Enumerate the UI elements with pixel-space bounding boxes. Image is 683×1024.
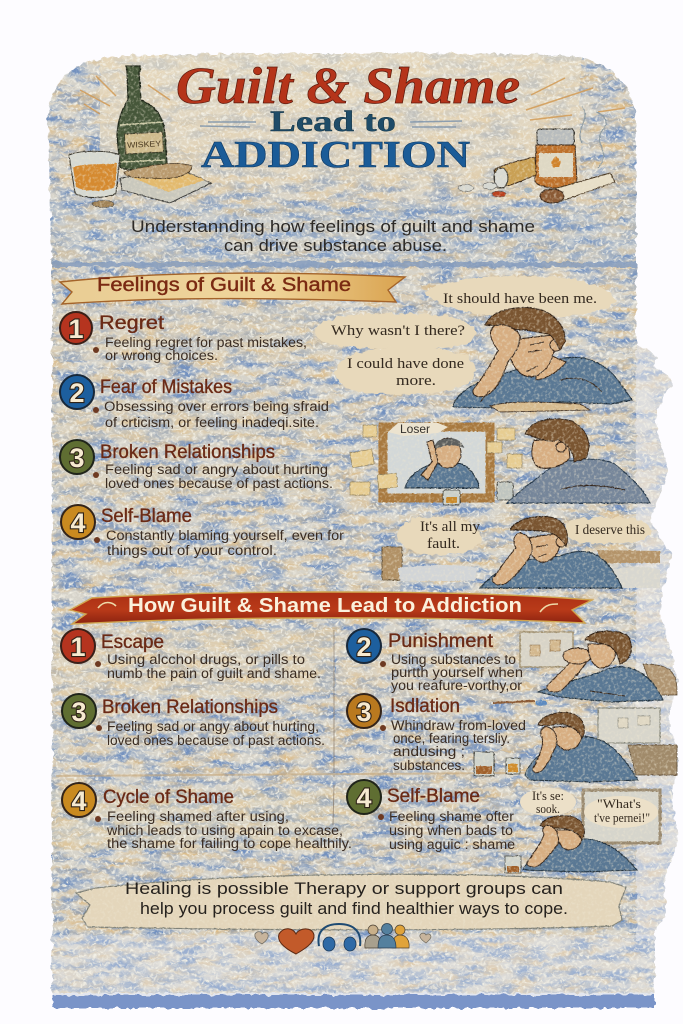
icon: whiskey bottle xyxy=(117,66,167,170)
illustration: man with fist at face xyxy=(493,631,677,706)
icon: support group xyxy=(365,924,409,948)
icon: heart xyxy=(279,929,314,954)
speech bubble: What's t've pernei: "What's xyxy=(597,797,641,811)
label: WISKEY: WISKEY xyxy=(127,139,162,150)
speech bubble: It's all my fault: fault. xyxy=(427,536,460,552)
speech bubble: It should have been me: It should have been me. xyxy=(443,291,597,307)
item: 3 Broken Relationships: Broken Relationships xyxy=(100,442,275,463)
item: 3 Broken Relationships: Feeling sad or angry about hurting xyxy=(105,462,328,477)
item: 3 Isolation xyxy=(347,694,526,773)
heading: ADDICTION: ADDICTION xyxy=(201,134,470,176)
item: 1 Escape: Escape xyxy=(101,632,164,653)
icon: book with cloth xyxy=(92,164,211,208)
item: 2 Fear of Mistakes: Fear of Mistakes xyxy=(100,377,232,398)
item: 4 Self-Blame: using aguic : shame xyxy=(389,837,515,852)
item: 4 Cycle of Shame: which leads to using apain to excase, xyxy=(106,823,343,838)
item: 3 Isolation: Isdlation xyxy=(390,696,460,717)
item: 2 Punishment: you reafure-vorthy,or xyxy=(391,678,523,693)
heading: Lead to: Lead to xyxy=(270,105,396,138)
sticky note label: Loser xyxy=(388,422,448,436)
item: 3 Isolation: Whindraw from-loved xyxy=(391,718,526,733)
item: 4 Self-Blame: things out of your control. xyxy=(107,543,277,558)
item: 1 Regret: 1 xyxy=(68,314,84,344)
item: 4 Cycle of Shame: Cycle of Shame xyxy=(103,787,234,808)
illustration: man on bed holding head xyxy=(382,516,660,588)
title block xyxy=(176,58,520,176)
item: 4 Self-Blame xyxy=(61,505,345,558)
item: 4 Self-Blame: using when bads to xyxy=(389,823,513,838)
item: 4 Self-Blame: Constantly blaming yourself, even for xyxy=(106,528,345,543)
speech bubble: What's t've pernei xyxy=(584,796,658,828)
icon: cigarette with smoke xyxy=(540,106,615,203)
speech bubble: It's se: sook xyxy=(520,788,576,816)
item: 2 Punishment: Using substances to xyxy=(391,652,516,667)
icon: small heart right xyxy=(420,933,431,943)
illustration: man with head in hand and drinks xyxy=(474,708,677,782)
speech bubble: It's all my fault: It's all my xyxy=(420,519,480,535)
item: 4 Self-Blame: 4 xyxy=(356,783,372,813)
item: 1 Escape: 1 xyxy=(70,632,86,662)
icon: whiskey glass xyxy=(69,151,120,198)
section banner: How Guilt & Shame Lead to Addiction xyxy=(70,592,592,624)
item: 4 Cycle of Shame: 4 xyxy=(71,786,87,816)
item: 2 Punishment xyxy=(347,629,523,693)
item: 3 Broken Relationships: 3 xyxy=(69,443,85,473)
illustration: man facing mirror xyxy=(507,419,650,503)
banner: healing is possible xyxy=(76,874,626,930)
icon: tipped pill bottle and pills xyxy=(458,157,536,197)
item: 3 Broken Relationships xyxy=(60,440,333,491)
item: 3 Isolation: once, fearing tersliy. xyxy=(393,731,510,746)
speech bubble: What's t've pernei: t've pernei!" xyxy=(594,811,650,825)
item: 1 Escape: numb the pain of guilt and shame. xyxy=(107,666,321,681)
item: 3 Broken Relationships: Feeling sad or angy about hurting, xyxy=(107,719,319,734)
item: 3 Broken Relationships: Broken Relationships xyxy=(102,697,278,718)
item: 3 Broken Relationships: loved ones because of past actions. xyxy=(107,733,325,748)
item: 3 Broken Relationships xyxy=(62,694,325,748)
item: 4 Self-Blame: 4 xyxy=(70,508,86,538)
item: 2 Fear of Mistakes: Obsessing over errors being sfraid xyxy=(104,399,329,414)
subtitle: can drive substance abuse. xyxy=(224,236,447,255)
banner: healing is possible: help you process guilt and find healthier ways to cope. xyxy=(140,899,568,918)
item: 2 Punishment: Punishment xyxy=(388,631,494,652)
speech bubble: I could have done more xyxy=(335,348,476,394)
item: 1 Regret: Regret xyxy=(99,313,165,334)
sticky note label: Loser: Loser xyxy=(400,422,430,436)
rays and flourishes around the title xyxy=(80,76,625,127)
section banner: Feelings of Guilt & Shame xyxy=(60,273,405,304)
item: 2 Fear of Mistakes: 2 xyxy=(69,378,85,408)
divider lines xyxy=(56,630,658,825)
item: 3 Isolation: substances. xyxy=(393,758,465,773)
section banner: Feelings of Guilt & Shame: Feelings of Guilt & Shame xyxy=(97,275,351,296)
item: 2 Fear of Mistakes: of crticism, or feeling inadeqi.site. xyxy=(105,415,319,430)
item: 4 Cycle of Shame: the shame for failing to cope healthily. xyxy=(107,836,352,851)
item: 4 Self-Blame: Self-Blame xyxy=(387,786,480,807)
speech bubble: Why wasn't I there? xyxy=(315,313,476,349)
section banner: How Guilt & Shame Lead to Addiction: How Guilt & Shame Lead to Addiction xyxy=(128,595,522,617)
item: 4 Cycle of Shame xyxy=(62,783,352,851)
item: 3 Broken Relationships: 3 xyxy=(71,697,87,727)
subtitle: Understannding how feelings of guilt and shame xyxy=(131,217,535,236)
speech bubble: I deserve this xyxy=(565,518,651,544)
speech bubble: I deserve this: I deserve this xyxy=(575,522,645,537)
speech bubble: It's all my fault xyxy=(398,517,481,555)
heading: Guilt & Shame: Guilt & Shame xyxy=(176,58,520,115)
illustration: man holding head xyxy=(453,308,632,412)
speech bubble: I could have done more: I could have done xyxy=(347,356,464,372)
item: 4 Self-Blame xyxy=(347,780,515,852)
item: 3 Isolation: andusing ; xyxy=(393,744,465,759)
speech bubble: It's se: sook: It's se: xyxy=(532,789,564,803)
item: 1 Regret xyxy=(60,312,307,363)
item: 1 Escape xyxy=(61,629,321,681)
speech bubble: It should have been me xyxy=(425,276,615,317)
item: 4 Self-Blame: Self-Blame xyxy=(101,506,192,527)
item: 3 Broken Relationships: loved ones because of past actions. xyxy=(105,476,333,491)
illustration: man at desk with speech bubbles xyxy=(505,788,660,873)
item: 2 Fear of Mistakes xyxy=(60,375,329,430)
item: 1 Escape: Using alcchol drugs, or pills to xyxy=(107,652,305,667)
speech bubble: Why wasn't I there?: Why wasn't I there? xyxy=(331,323,465,339)
item: 2 Punishment: purtth yourself when xyxy=(391,665,523,680)
item: 1 Regret: or wrong choices. xyxy=(105,348,218,363)
illustration: mirror with sticky notes xyxy=(350,425,522,505)
banner: healing is possible: Healing is possible Therapy or support groups can xyxy=(125,879,563,898)
icon: small heart left xyxy=(255,932,268,944)
icon: pill jar xyxy=(535,129,577,188)
speech bubble: I could have done more: more. xyxy=(396,373,436,389)
subtitle xyxy=(131,217,535,255)
speech bubble: It's se: sook: sook. xyxy=(536,802,560,816)
icon row: healing symbols xyxy=(255,924,431,954)
item: 3 Isolation: 3 xyxy=(356,697,372,727)
item: 4 Self-Blame: Feeling shame ofter xyxy=(389,809,515,824)
item: 2 Punishment: 2 xyxy=(356,632,372,662)
item: 1 Regret: Feeling regret for past mistakes, xyxy=(105,335,307,350)
item: 4 Cycle of Shame: Feeling shamed after using, xyxy=(107,809,289,824)
icon: headphones xyxy=(318,924,360,951)
